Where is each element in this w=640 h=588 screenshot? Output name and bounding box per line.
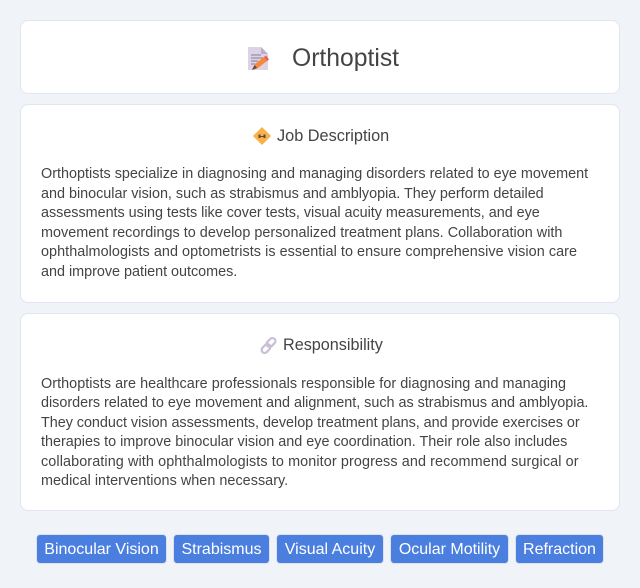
text: job description: Orthoptists specialize in diagnosing and managing disorders related to eye movement xyxy=(41,166,588,182)
text: responsibility: medical interventions when necessary. xyxy=(41,473,288,489)
tag: strabismus: Strabismus xyxy=(181,541,262,558)
text: job description: and binocular vision, such as strabismus and amblyopia. They perform detailed xyxy=(41,186,544,202)
tag: strabismus xyxy=(173,534,270,564)
tag: visual acuity xyxy=(276,534,384,564)
heading: job description: Job Description xyxy=(277,127,389,145)
text: responsibility: therapies to improve binocular vision and eye coordination. Their role also includes xyxy=(41,434,567,450)
tag: ocular motility: Ocular Motility xyxy=(399,541,500,558)
panel: responsibility xyxy=(20,313,620,511)
text: job description: movement recordings to develop personalized treatment plans. Collaboration with xyxy=(41,224,562,240)
icon: chain link xyxy=(260,337,276,354)
panel: title card xyxy=(20,20,620,94)
text: job description: ophthalmologists and optometrists is essential to ensure comprehensive vision care xyxy=(41,244,577,260)
tag: ocular motility xyxy=(390,534,509,564)
text: responsibility xyxy=(41,376,588,489)
text: job description xyxy=(41,166,588,280)
text: responsibility: disorders related to eye movement and alignment, such as strabismus and amblyopia. xyxy=(41,395,588,411)
text: job description: assessments using tests like cover tests, visual acuity measurements, and eye xyxy=(41,205,540,221)
heading: responsibility: Responsibility xyxy=(283,336,383,354)
tag: visual acuity: Visual Acuity xyxy=(285,541,375,558)
text: responsibility: Orthoptists are healthcare professionals responsible for diagnosing and managing xyxy=(41,376,566,392)
text: job description: and improve patient outcomes. xyxy=(41,264,237,280)
tag: refraction: Refraction xyxy=(523,541,596,558)
tag: binocular vision xyxy=(36,534,167,564)
tag: refraction xyxy=(515,534,604,564)
title: Orthoptist xyxy=(292,44,399,72)
icon: document with pencil xyxy=(248,47,269,70)
text: responsibility: They conduct vision assessments, develop treatment plans, and provide exercises or xyxy=(41,414,580,430)
tag: binocular vision: Binocular Vision xyxy=(44,541,159,558)
icon: diamond sign xyxy=(253,127,271,145)
panel: job description xyxy=(20,104,620,303)
text: responsibility: collaborating with ophthalmologists to monitor progress and recommend surgical or xyxy=(41,454,579,470)
